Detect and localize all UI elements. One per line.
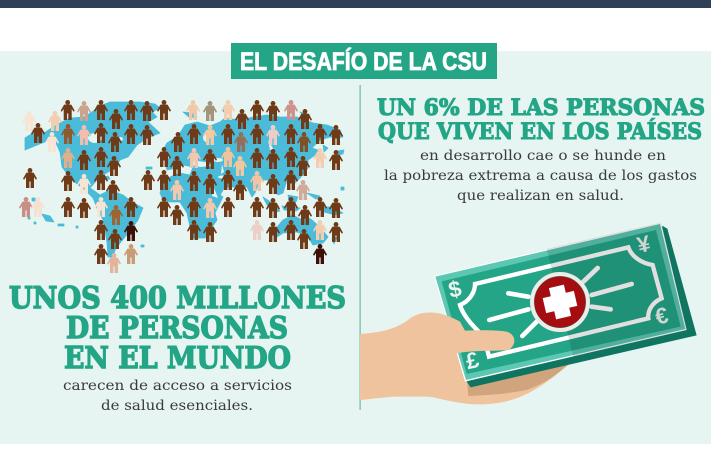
- ornate frame: [460, 247, 662, 357]
- fingers over note: [360, 312, 514, 397]
- back banknotes: [467, 226, 697, 387]
- title banner: [231, 43, 497, 79]
- body text: right: en desarrollo cae o se hunde en: [420, 148, 666, 164]
- inland seas and bays: [88, 132, 274, 198]
- Eurasia and Africa: [160, 115, 343, 238]
- banknote: [434, 222, 687, 382]
- currency symbols: €: [652, 301, 671, 330]
- headline: 6%: [377, 95, 705, 145]
- body text: right: la pobreza extrema a causa de los gastos: [384, 168, 697, 184]
- rays: [489, 268, 632, 336]
- currency symbols: £: [463, 346, 482, 374]
- Iceland and arctic isles: [183, 108, 310, 118]
- headline: 400 millones: [9, 281, 346, 376]
- medical seal: [532, 274, 588, 330]
- world map: [25, 102, 344, 257]
- body text: right: que realizan en salud.: [457, 188, 624, 204]
- Indonesia, Philippines, New Guinea, Japan, New Zealand: [263, 145, 344, 244]
- body text: left: de salud esenciales.: [101, 398, 253, 414]
- palm shadow: [467, 364, 568, 396]
- body text: right: [384, 148, 697, 204]
- body text: left: [63, 378, 292, 414]
- body text: left: carecen de acceso a servicios: [63, 378, 292, 394]
- headline: 400 millones: DE PERSONAS: [66, 311, 288, 346]
- currency symbols: ¥: [634, 230, 653, 258]
- North and South America: [25, 102, 160, 257]
- headline: 6%: UN 6% DE LAS PERSONAS: [377, 95, 705, 121]
- crowd of people over map: [19, 100, 343, 273]
- headline: 400 millones: EN EL MUNDO: [64, 341, 291, 376]
- Caribbean and Pacific islands: [28, 167, 152, 247]
- illustration: hand holding money: [360, 222, 697, 404]
- Australia: [277, 215, 328, 245]
- headline: 400 millones: UNOS 400 MILLONES: [9, 281, 346, 316]
- title banner: EL DESAFÍO DE LA CSU: [240, 47, 487, 76]
- top bar: [0, 0, 711, 8]
- currency symbols: $: [446, 275, 464, 303]
- centre divider: [360, 85, 361, 410]
- hand palm: [360, 334, 568, 404]
- currency symbols: [446, 230, 671, 374]
- shaded half of note: [547, 222, 687, 357]
